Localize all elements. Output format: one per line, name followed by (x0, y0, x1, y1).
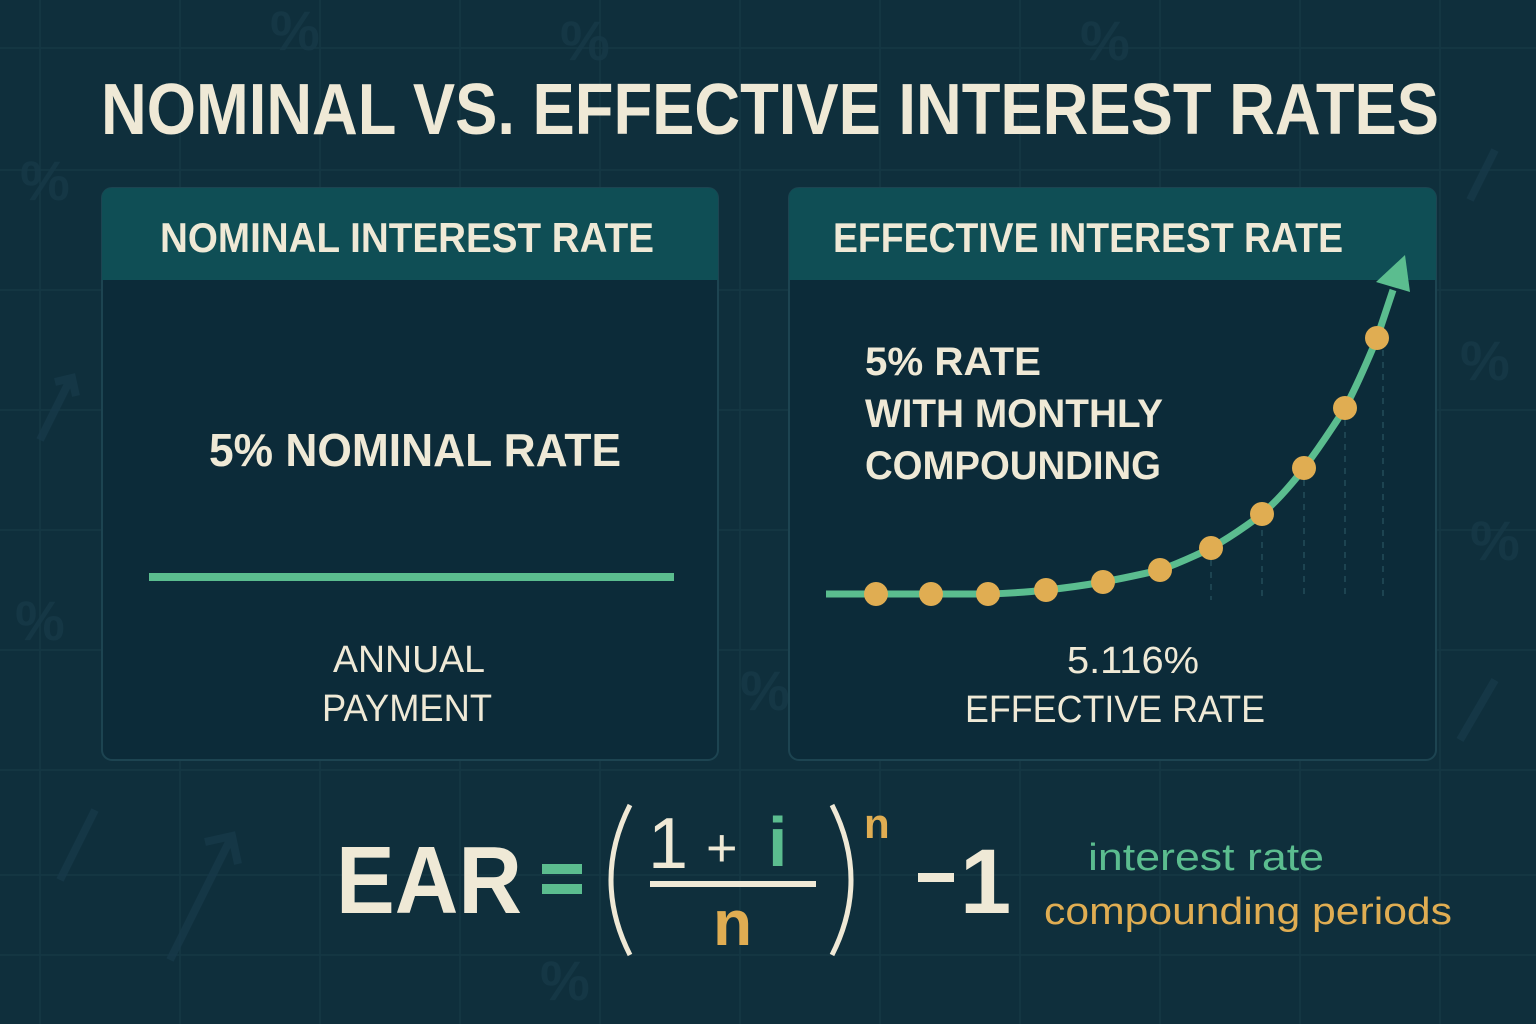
text: % (740, 659, 790, 722)
text: 5% rate with monthly compounding (865, 340, 1163, 488)
formula: 1 (648, 804, 688, 884)
panel: nominal (102, 188, 718, 760)
text: % (540, 949, 590, 1012)
heading: nominal interest rate: NOMINAL INTEREST RATE (160, 214, 654, 261)
panel: effective (789, 188, 1436, 760)
text: % (20, 149, 70, 212)
formula: n (713, 887, 752, 959)
formula (336, 800, 1011, 959)
flat line (149, 573, 674, 581)
text: % (1080, 9, 1130, 72)
text: annual payment: PAYMENT (322, 688, 492, 730)
formula: n (864, 800, 890, 847)
text: 5% rate with monthly compounding: 5% RATE (865, 340, 1041, 384)
text: 5.116% effective rate: 5.116% (1067, 640, 1199, 682)
text: 5.116% effective rate (965, 640, 1265, 731)
text: % (15, 589, 65, 652)
legend: interest rate: interest rate (1088, 837, 1324, 879)
text: 5.116% effective rate: EFFECTIVE RATE (965, 689, 1265, 731)
text: % (1470, 509, 1520, 572)
text: annual payment (322, 639, 492, 730)
legend: compounding periods: compounding periods (1044, 891, 1452, 933)
text: 5% nominal rate: 5% NOMINAL RATE (209, 424, 621, 476)
text: % (560, 9, 610, 72)
panel header: effective (789, 188, 1436, 280)
heading: effective interest rate: EFFECTIVE INTEREST RATE (833, 214, 1343, 261)
formula: + (706, 818, 738, 878)
text: 5% rate with monthly compounding: COMPOUNDING (865, 444, 1161, 488)
text: % (1460, 329, 1510, 392)
text: annual payment: ANNUAL (333, 639, 485, 681)
formula: EAR (336, 827, 522, 934)
text: % (270, 0, 320, 62)
text: 5% rate with monthly compounding: WITH MONTHLY (865, 392, 1163, 436)
panel header: nominal (102, 188, 718, 280)
chart: compounding curve (826, 255, 1410, 606)
formula: 1 (960, 831, 1011, 933)
formula: i (768, 803, 787, 881)
